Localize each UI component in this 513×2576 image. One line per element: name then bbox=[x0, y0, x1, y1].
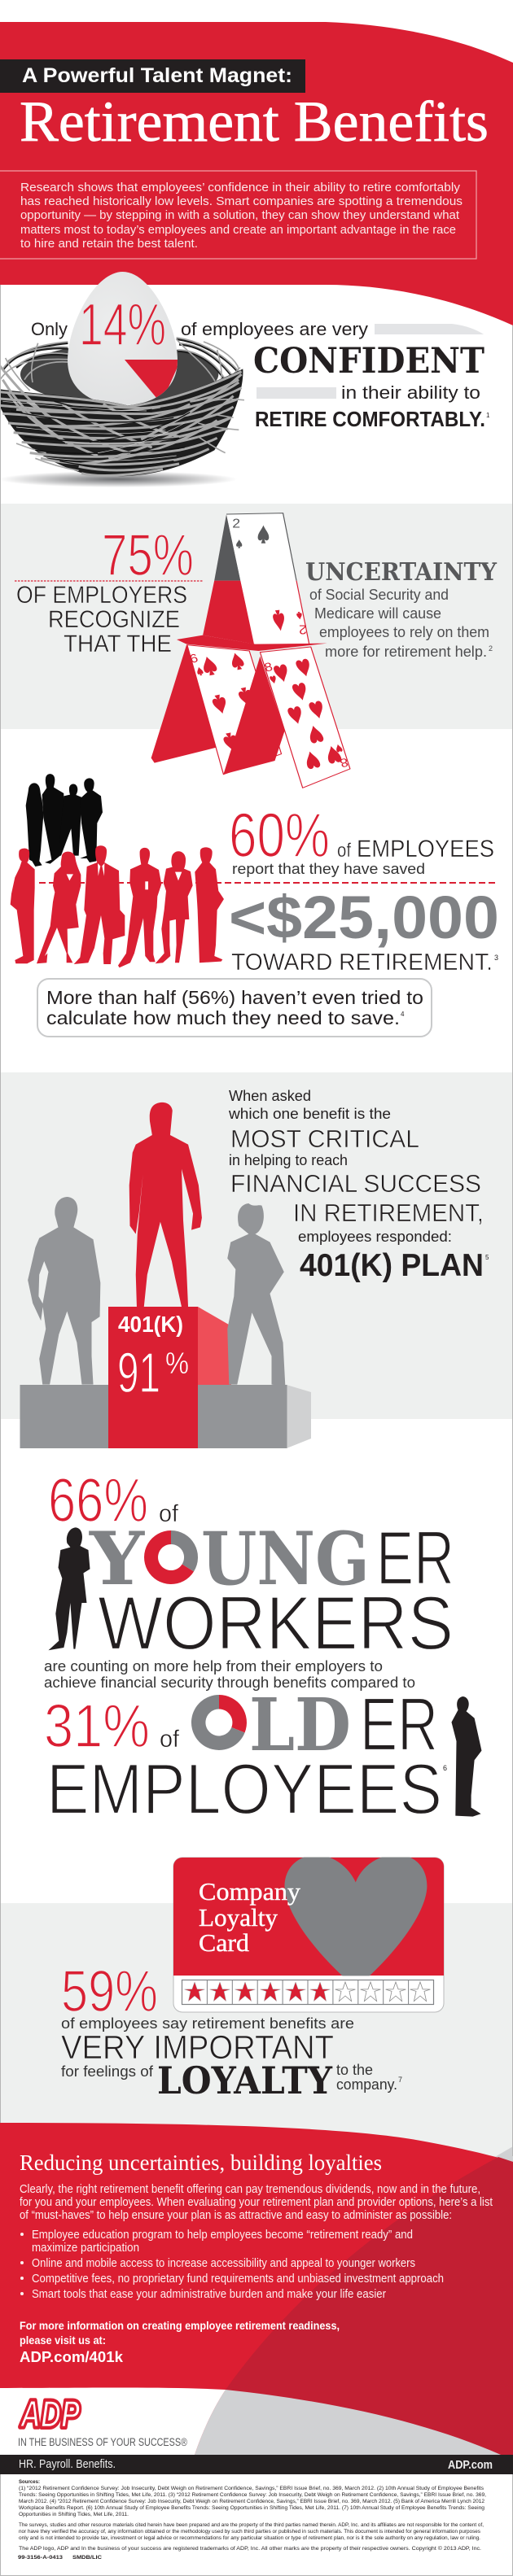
text: of employers recognize that the: OF EMPLOYERS bbox=[16, 582, 187, 609]
header red banner bbox=[0, 22, 513, 325]
panel: 401(k) statistic bbox=[1, 1072, 512, 1448]
text: for feelings of: for feelings of bbox=[61, 2063, 154, 2080]
text: to the company bbox=[336, 2062, 402, 2093]
intro text box: opportunity — by stepping in with a solution, they can show they understand what bbox=[20, 208, 460, 222]
text block: question: which one benefit is the bbox=[228, 1106, 391, 1122]
tagline: IN THE BUSINESS OF YOUR SUCCESS® bbox=[18, 2436, 187, 2448]
text: to the company: 7 bbox=[398, 2076, 402, 2084]
text: counting on more help: are counting on more help from their employers to bbox=[44, 1658, 383, 1674]
text block: question: employees responded: bbox=[298, 1229, 452, 1245]
sources and legal text: nor have they verified the accuracy of, any information obtained or the methodology used by such third parties or published in such materials. This document is intended for general information purposes bbox=[19, 2529, 481, 2535]
text block: question: 401(K) PLAN bbox=[300, 1248, 484, 1283]
text: social security and medicare: employees to rely on them bbox=[319, 624, 489, 640]
text: of: of bbox=[160, 1726, 180, 1753]
footer bar: HR. Payroll. Benefits. bbox=[19, 2457, 116, 2471]
egg red wedge bbox=[125, 360, 178, 397]
dashed rule bbox=[39, 882, 498, 884]
icon: house of cards bbox=[151, 513, 350, 788]
statistic 91%: 91 bbox=[117, 1341, 160, 1404]
text block: question: 5 bbox=[485, 1254, 489, 1261]
text: of employers recognize that the bbox=[16, 582, 187, 657]
icon: red group of people bbox=[11, 845, 224, 967]
word: older: ER bbox=[360, 1682, 438, 1766]
right card bbox=[260, 647, 350, 788]
top card bbox=[226, 513, 309, 649]
sources and legal text: Opportunities in Shifting Tides, Met Life, 2011. bbox=[19, 2512, 129, 2517]
heading: uncertainty: UNCERTAINTY bbox=[305, 558, 498, 587]
text: of employers recognize that the: RECOGNIZE bbox=[48, 606, 180, 633]
ADP logo: ADP bbox=[20, 2392, 80, 2435]
back of top card bbox=[203, 514, 255, 644]
icon: black group of people bbox=[26, 774, 103, 867]
loyalty card bbox=[173, 1854, 444, 2012]
text: of employees are very: of employees are very bbox=[181, 319, 368, 339]
word: younger: UNG bbox=[201, 1516, 370, 1602]
icon: young woman silhouette bbox=[48, 1527, 90, 1650]
sources and legal text: 99-3156-A-0413 bbox=[18, 2555, 63, 2561]
bullet list: Smart tools that ease your administrative burden and make your life easier bbox=[32, 2288, 386, 2301]
grey corner wedge bbox=[493, 2146, 513, 2164]
footer bar bbox=[0, 2455, 513, 2474]
section background bbox=[1, 1072, 512, 1419]
panel: closing recommendations bbox=[0, 2123, 513, 2455]
horizontal card bbox=[177, 635, 327, 651]
text: employees: EMPLOYEES bbox=[357, 836, 494, 862]
statistic 59%: 59% bbox=[61, 1959, 158, 2024]
podium base bbox=[20, 1385, 311, 1448]
text: toward retirement: TOWARD RETIREMENT. bbox=[231, 950, 493, 976]
statistic 75%: 75% bbox=[102, 523, 194, 588]
bullet list bbox=[20, 2229, 444, 2301]
sources and legal text: (1) “2012 Retirement Confidence Survey: Job Insecurity, Debt Weigh on Retirement Confidence, Savings,” EBRI Issue Brief, no. 369, March 2012. (2) 10th Annual Study of Employee Benefits bbox=[19, 2486, 484, 2491]
panel: younger and older workers bbox=[44, 1466, 481, 1829]
statistic 60%: 60% bbox=[229, 801, 330, 871]
text: counting on more help: achieve financial security through benefits compared to bbox=[44, 1674, 415, 1691]
word: employees: EMPLOYEES bbox=[46, 1749, 442, 1829]
card title: Company bbox=[199, 1877, 301, 1906]
text block: question: When asked bbox=[229, 1088, 311, 1104]
text block: question: MOST CRITICAL bbox=[230, 1124, 419, 1153]
text: to the company: to the bbox=[336, 2062, 373, 2078]
footnote 1: 1 bbox=[486, 412, 490, 419]
footnote 6: 6 bbox=[443, 1764, 447, 1772]
panel: uncertainty statistic bbox=[1, 504, 512, 788]
word: younger: ER bbox=[376, 1515, 454, 1600]
word: workers: WORKERS bbox=[98, 1580, 454, 1666]
heading: Reducing uncertainties, building loyalties bbox=[20, 2150, 382, 2175]
title: Retirement Benefits bbox=[20, 90, 489, 154]
intro text box: to hire and retain the best talent. bbox=[20, 237, 198, 251]
right back card bbox=[223, 657, 285, 775]
panel: header bbox=[0, 22, 513, 325]
left back card bbox=[151, 645, 217, 763]
icon: older man silhouette bbox=[451, 1696, 481, 1817]
icon: egg bbox=[65, 269, 181, 407]
heading: confident: CONFIDENT bbox=[253, 341, 484, 382]
bullet list: Employee education program to help employees become “retirement ready” and bbox=[32, 2229, 413, 2242]
sources and legal text: Trends: Seeing Opportunities in Shifting Tides, Met Life, 2011. (3) “2012 Retirement Confidence Survey: Job Insecurity, Debt Weigh on Retirement Confidence, Savings,” EBRI Issue Brief, no. 369, bbox=[19, 2492, 486, 2498]
icon: nest back bbox=[0, 338, 240, 404]
text block: intro: Clearly, the right retirement benefit offering can pay tremendous dividends, now and in the future, bbox=[20, 2183, 480, 2196]
footnote 3: 3 bbox=[494, 954, 498, 962]
sources and legal text bbox=[18, 2479, 486, 2561]
callout: calculate how much they need to save. bbox=[46, 1007, 400, 1028]
podium label 401(k): 401(K) bbox=[118, 1312, 183, 1337]
text block: intro bbox=[20, 2183, 493, 2222]
text block: question: IN RETIREMENT, bbox=[293, 1198, 484, 1227]
decorative label bar bbox=[375, 324, 484, 334]
text block: question: FINANCIAL SUCCESS bbox=[230, 1169, 481, 1198]
sources and legal text: only and is not intended to provide tax, investment or legal advice or recommendations for any particular situation or type of retirement plan, nor is it the sole authority on any regulation, law or ruling. bbox=[19, 2535, 480, 2541]
text: social security and medicare bbox=[309, 587, 493, 660]
text: of employers recognize that the: THAT THE bbox=[64, 631, 172, 657]
footer bar: ADP.com bbox=[448, 2458, 493, 2472]
sources and legal text: March 2012. (4) “2012 Retirement Confidence Survey: Job Insecurity, Debt Weigh on Retirement Confidence, Savings,” EBRI Issue Brief, no. 369, March 2012. (5) Bank of America Merrill Lynch 2012 bbox=[19, 2499, 484, 2504]
section background bbox=[1, 1903, 512, 2172]
text block: question bbox=[228, 1088, 489, 1283]
sources and legal text: Workplace Benefits Report. (6) 10th Annual Study of Employee Benefits Trends: Seeing Opportunities in Shifting Tides, Met Life, 2011. (7) 10th Annual Study of Employee Benefits Trends: Seeing bbox=[19, 2505, 484, 2511]
figure: winner bbox=[129, 1102, 202, 1307]
bullet list: Online and mobile access to increase accessibility and appeal to younger workers bbox=[32, 2257, 415, 2270]
text: social security and medicare: 2 bbox=[489, 644, 493, 653]
white logo area bbox=[0, 2387, 226, 2455]
section background bbox=[1, 504, 512, 729]
panel: savings statistic bbox=[11, 774, 499, 1037]
red background bbox=[0, 2123, 513, 2455]
subtitle bar bbox=[0, 59, 305, 93]
right card: 8 bbox=[338, 755, 350, 770]
text: of: of bbox=[159, 1500, 179, 1527]
text block: intro: of “must-haves” to help ensure your plan is as attractive and easy to administer as possible: bbox=[20, 2209, 452, 2222]
statistic 91%: % bbox=[165, 1347, 189, 1380]
ADP logo: ADP bbox=[20, 2392, 80, 2435]
sources and legal text: SMDB/LIC bbox=[72, 2555, 102, 2561]
icon: heart bbox=[285, 1857, 427, 1976]
figure: left runner-up bbox=[28, 1197, 100, 1385]
dark red swoosh bbox=[195, 2157, 513, 2455]
text: counting on more help bbox=[44, 1658, 415, 1691]
callout: More than half (56%) haven’t even tried to bbox=[46, 987, 423, 1008]
intro text box: Research shows that employees’ confidence in their ability to retire comfortably bbox=[20, 181, 461, 194]
card red face bbox=[173, 1858, 444, 1976]
intro text box: matters most to today’s employees and create an important advantage in the race bbox=[20, 223, 456, 237]
sources and legal text: The surveys, studies and other resource materials cited herein have been prepared and are the property of the third parties named therein. ADP, Inc. and its affiliates are not responsible for the content of, bbox=[19, 2522, 484, 2528]
statistic 66%: 66% bbox=[48, 1466, 148, 1535]
podium centre bbox=[108, 1307, 231, 1448]
subtitle bar: A Powerful Talent Magnet: bbox=[22, 64, 292, 87]
top card: 2 bbox=[232, 516, 240, 530]
heading: loyalty: LOYALTY bbox=[157, 2059, 333, 2102]
word: younger: Y bbox=[89, 1516, 146, 1602]
bullet list: maximize participation bbox=[32, 2242, 139, 2255]
call to action: For more information on creating employee retirement readiness, bbox=[20, 2319, 340, 2332]
text: of: of bbox=[337, 840, 351, 862]
icon: nest front bbox=[0, 366, 244, 476]
intro text box bbox=[0, 171, 476, 259]
call to action bbox=[20, 2319, 340, 2365]
nest shadow bbox=[0, 471, 237, 487]
text block: question: in helping to reach bbox=[229, 1152, 348, 1168]
word: younger bbox=[89, 1515, 454, 1602]
text: only: Only bbox=[31, 319, 68, 339]
word: older: LD bbox=[249, 1682, 351, 1767]
word: older bbox=[191, 1682, 438, 1767]
star rating bbox=[182, 1980, 433, 2005]
text: in their ability to: in their ability to bbox=[341, 382, 480, 403]
text: social security and medicare: of Social Security and bbox=[309, 587, 449, 603]
statistic: less than 25,000: <$25,000 bbox=[229, 884, 499, 951]
call to action: please visit us at: bbox=[20, 2334, 106, 2347]
panel: loyalty statistic bbox=[1, 1854, 512, 2172]
top card: 2 bbox=[299, 622, 307, 637]
decorative label bar 2 bbox=[256, 387, 336, 399]
sources and legal text: The ADP logo, ADP and In the business of your success are registered trademarks of ADP, Inc. All other marks are the property of their respective owners. Copyright © 2013 ADP, Inc. bbox=[19, 2545, 481, 2552]
call to action: ADP.com/401k bbox=[20, 2349, 124, 2365]
card title: Loyalty bbox=[199, 1903, 278, 1932]
sources and legal text: Sources: bbox=[19, 2479, 40, 2485]
right card: 8 bbox=[263, 660, 274, 675]
figure: right runner-up bbox=[227, 1203, 285, 1386]
left card: 6 bbox=[188, 652, 200, 666]
intro text box: has reached historically low levels. Smart companies are spotting a tremendous bbox=[20, 194, 463, 208]
text: retire comfortably: RETIRE COMFORTABLY. bbox=[255, 407, 485, 431]
text: report that they have saved: report that they have saved bbox=[232, 861, 425, 877]
panel: confidence statistic bbox=[0, 269, 490, 487]
grey swoosh bbox=[195, 2390, 501, 2455]
callout: 4 bbox=[401, 1011, 405, 1018]
card title bbox=[199, 1877, 301, 1957]
card title: Card bbox=[199, 1928, 250, 1957]
statistic 14%: 14% bbox=[79, 292, 166, 358]
text: social security and medicare: Medicare will cause bbox=[314, 605, 441, 622]
callout bbox=[37, 979, 432, 1037]
text: to the company: company. bbox=[336, 2076, 397, 2093]
dashed rule bbox=[15, 580, 204, 582]
bullet list: Competitive fees, no proprietary fund requirements and unbiased investment approach bbox=[32, 2273, 444, 2286]
text: very important: VERY IMPORTANT bbox=[61, 2028, 334, 2066]
text: of employees say: of employees say retirement benefits are bbox=[61, 2015, 354, 2032]
text: social security and medicare: more for retirement help. bbox=[325, 644, 487, 660]
left card bbox=[187, 645, 282, 775]
statistic 31%: 31% bbox=[44, 1692, 150, 1760]
